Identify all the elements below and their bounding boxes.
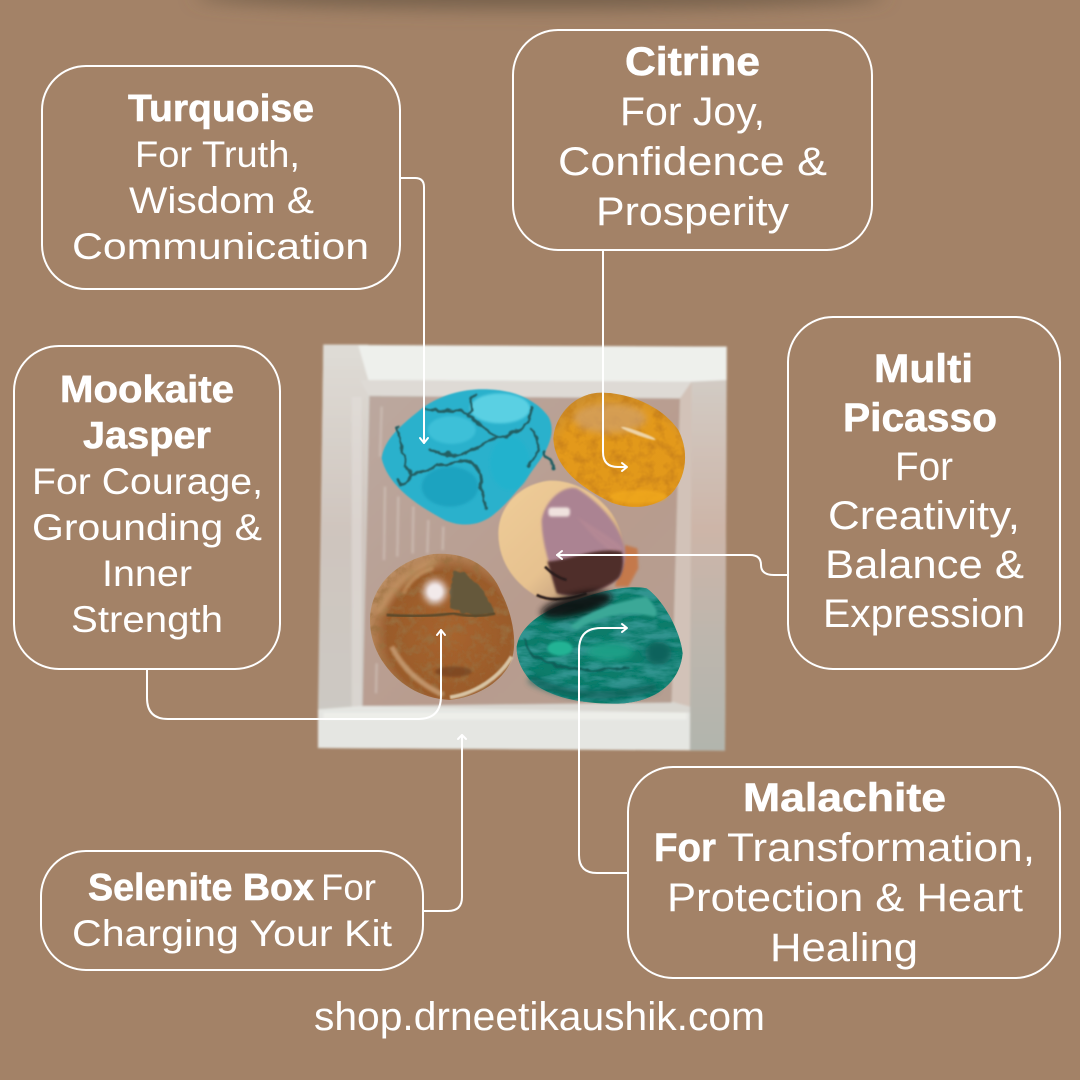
text: grounding: Grounding &	[32, 506, 262, 548]
arrow: mookaite jasper	[147, 630, 445, 719]
text: for: For	[321, 866, 376, 908]
text: for: For	[895, 445, 953, 489]
stone: malachite	[517, 586, 683, 704]
stone: orange shard	[615, 545, 638, 587]
text: for joy: For Joy,	[620, 90, 765, 134]
stone: citrine	[553, 393, 685, 507]
text: confidence: Confidence &	[558, 140, 827, 184]
text: inner: Inner	[102, 552, 192, 594]
panel: mookaite jasper	[14, 346, 280, 669]
heading: selenite box: Selenite Box	[88, 867, 314, 909]
heading: malachite: Malachite	[743, 776, 946, 820]
heading: multi: Multi	[874, 347, 973, 391]
photo: selenite box with crystals	[318, 345, 727, 751]
stone: turquoise	[382, 389, 553, 525]
heading: jasper: Jasper	[83, 415, 211, 457]
text: charging your kit: Charging Your Kit	[72, 912, 393, 954]
text: for: For	[654, 826, 716, 870]
text: healing: Healing	[770, 926, 918, 970]
arrow: malachite	[579, 624, 628, 873]
heading: citrine: Citrine	[625, 40, 760, 84]
stone: mookaite jasper	[498, 481, 625, 601]
arrow: citrine	[603, 250, 627, 471]
text: prosperity: Prosperity	[596, 190, 789, 234]
stone: brown jasper	[370, 554, 514, 700]
panel: multi picasso	[788, 317, 1060, 669]
selenite box	[318, 345, 727, 751]
text: expression: Expression	[823, 592, 1025, 636]
arrow: turquoise	[401, 178, 428, 443]
panel: citrine	[513, 30, 872, 250]
heading: mookaite: Mookaite	[60, 369, 234, 411]
text: balance: Balance &	[825, 543, 1024, 587]
text: strength: Strength	[71, 598, 223, 640]
panel: turquoise	[42, 66, 400, 289]
text: wisdom: Wisdom &	[129, 179, 314, 221]
text: communication: Communication	[72, 225, 369, 267]
heading: picasso: Picasso	[843, 396, 997, 440]
heading: turquoise: Turquoise	[128, 88, 314, 130]
panel: malachite	[628, 767, 1060, 978]
top shadow	[195, 0, 885, 9]
text: creativity: Creativity,	[828, 494, 1020, 538]
connector arrows	[147, 178, 787, 911]
text: transformation: Transformation,	[727, 826, 1035, 870]
panel: selenite box	[41, 851, 423, 970]
text: protection and heart: Protection & Heart	[667, 876, 1023, 920]
text: for courage: For Courage,	[32, 460, 263, 502]
footer url: shop.drneetikaushik.com	[314, 995, 765, 1039]
arrow: selenite box	[423, 735, 466, 911]
text: for truth: For Truth,	[135, 133, 300, 175]
arrow: multi picasso	[557, 551, 787, 575]
